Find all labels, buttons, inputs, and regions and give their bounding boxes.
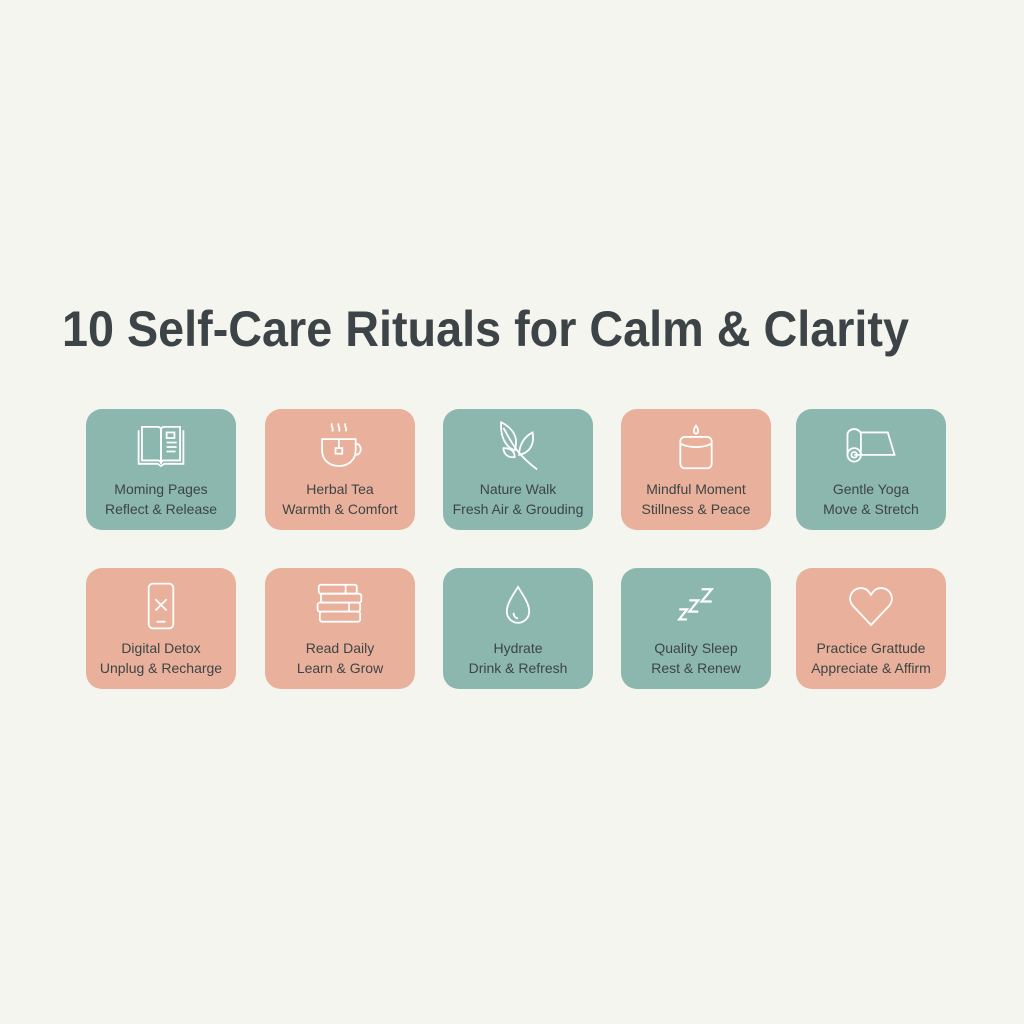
icon: zzz xyxy=(677,588,714,620)
icon: yoga mat xyxy=(846,428,896,462)
label: Read Daily xyxy=(306,640,374,656)
label xyxy=(811,640,931,676)
label: Quality Sleep xyxy=(654,640,738,656)
label xyxy=(651,640,741,676)
card: mindful moment xyxy=(621,409,771,530)
label: Warmth & Comfort xyxy=(282,500,398,516)
label xyxy=(823,481,919,516)
card: digital detox xyxy=(86,568,236,689)
label: Herbal Tea xyxy=(306,481,374,497)
label: Fresh Air & Grouding xyxy=(453,500,583,516)
label: Practice Grattude xyxy=(817,640,925,656)
label: Hydrate xyxy=(493,640,543,656)
card: morning pages xyxy=(86,409,236,530)
label xyxy=(105,481,217,516)
label: Moming Pages xyxy=(114,481,208,497)
card: gentle yoga xyxy=(796,409,946,530)
card: herbal tea xyxy=(265,409,415,530)
icon: leaves xyxy=(500,421,538,470)
label: Reflect & Release xyxy=(105,500,217,516)
label: Drink & Refresh xyxy=(469,660,567,676)
label: Stillness & Peace xyxy=(642,500,750,516)
label: Nature Walk xyxy=(480,481,556,497)
label xyxy=(453,481,583,517)
card: gratitude xyxy=(796,568,946,689)
icon: books xyxy=(316,584,362,623)
icon: book xyxy=(138,426,184,467)
label xyxy=(100,640,222,676)
label: Unplug & Recharge xyxy=(100,660,222,676)
card: nature walk xyxy=(443,409,593,530)
icon: phone xyxy=(148,582,174,630)
label: Appreciate & Affirm xyxy=(811,660,931,676)
label: Move & Stretch xyxy=(823,500,919,516)
label: Learn & Grow xyxy=(297,660,383,676)
icon: tea cup xyxy=(321,423,362,467)
label xyxy=(297,640,384,676)
label xyxy=(642,481,750,516)
card: quality sleep xyxy=(621,568,771,689)
label: Gentle Yoga xyxy=(833,481,909,497)
label xyxy=(282,481,398,516)
label: Digital Detox xyxy=(121,640,201,656)
card: hydrate xyxy=(443,568,593,689)
card: read daily xyxy=(265,568,415,689)
label: Rest & Renew xyxy=(651,660,741,676)
label: Mindful Moment xyxy=(646,481,746,497)
icon: candle xyxy=(679,424,713,470)
icon: water drop xyxy=(506,586,530,624)
icon: heart xyxy=(849,587,893,626)
title: 10 Self-Care Rituals for Calm & Clarity xyxy=(62,301,909,357)
label xyxy=(469,640,567,676)
